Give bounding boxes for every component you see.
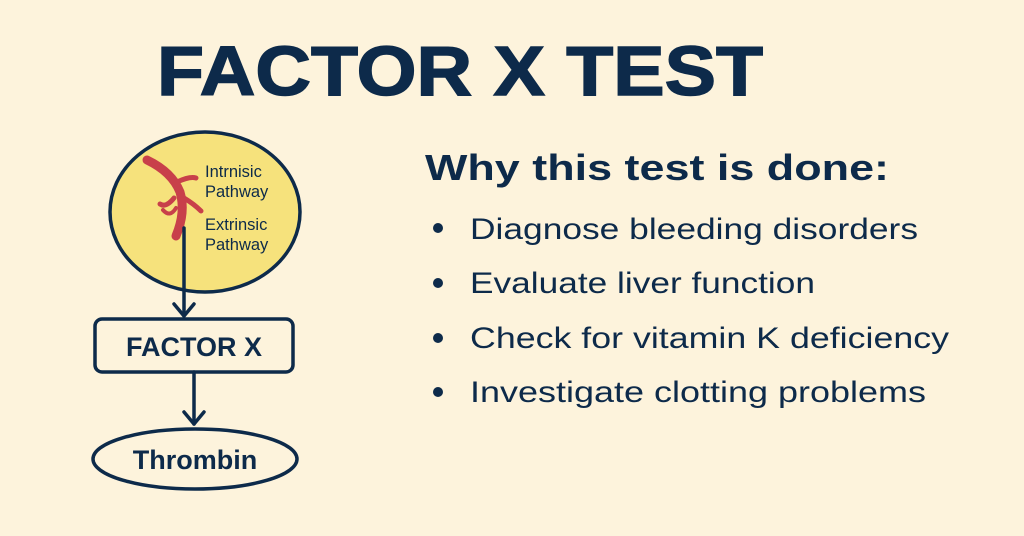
heading: why this test is done: Why this test is done: xyxy=(425,147,889,188)
ellipse: Thrombin xyxy=(93,429,297,489)
bullet 3: Check for vitamin K deficiency xyxy=(470,322,949,355)
diagram: coagulation pathway xyxy=(93,132,300,489)
pathway labels: Pathway xyxy=(205,183,269,201)
bullet 2: Evaluate liver function xyxy=(470,267,815,300)
icon: blood vessel branches xyxy=(147,160,201,236)
pathway labels xyxy=(205,163,269,254)
box: FACTOR X: FACTOR X xyxy=(126,332,262,362)
pathway labels: Pathway xyxy=(205,236,269,254)
arrow: to thrombin xyxy=(184,372,204,424)
title: FACTOR X TEST xyxy=(157,32,763,110)
arrow: to factor X xyxy=(174,228,194,316)
ellipse: Thrombin: Thrombin xyxy=(133,445,257,475)
box: FACTOR X xyxy=(95,319,293,372)
pathway labels: Extrinsic xyxy=(205,216,267,234)
pathway labels: Intrnisic xyxy=(205,163,262,181)
bullet list xyxy=(433,213,949,409)
bullet 1: Diagnose bleeding disorders xyxy=(470,213,918,246)
pathway circle xyxy=(110,132,300,292)
bullet 4: Investigate clotting problems xyxy=(470,376,926,409)
